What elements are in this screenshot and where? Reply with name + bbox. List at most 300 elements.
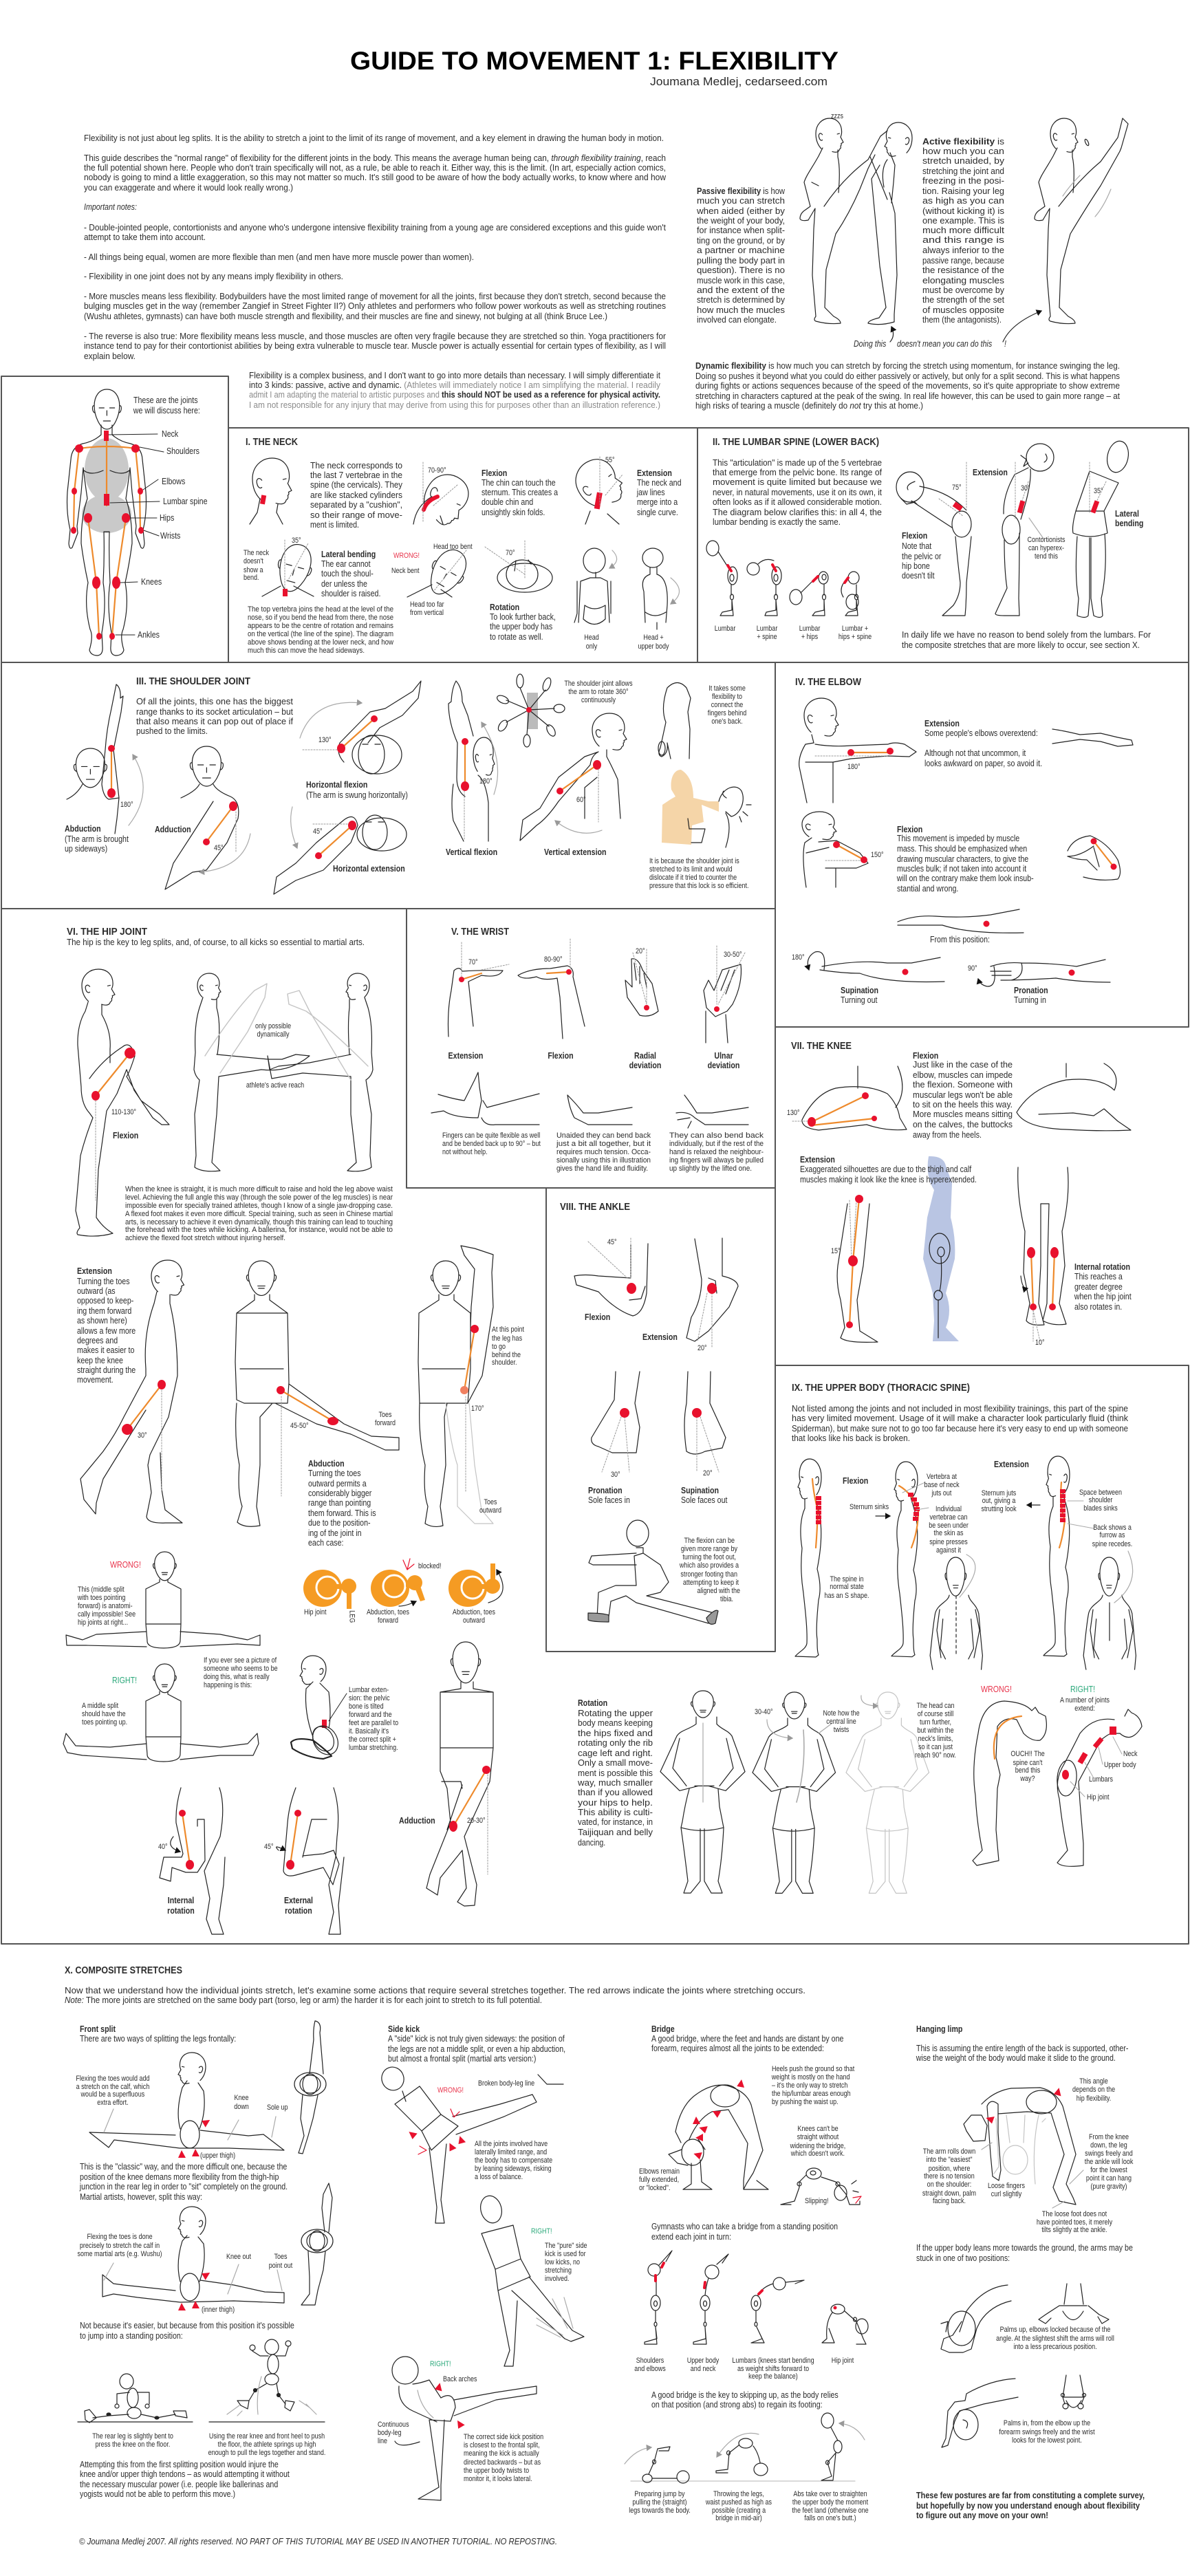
text: composite intro xyxy=(65,1985,805,2005)
figure: wrong neck bend: from vertical xyxy=(410,609,444,617)
text: active flexibility: one example. This is xyxy=(922,215,1004,226)
figure: wrong back bend: OUCH!! The xyxy=(1010,1750,1045,1758)
figure: vertical flexion: Vertical flexion xyxy=(446,847,497,857)
heading: X. COMPOSITE STRETCHES xyxy=(65,1965,182,1976)
heading: IX. THE UPPER BODY (THORACIC SPINE) xyxy=(792,1383,970,1394)
figure: fingers behind back: connect the xyxy=(711,701,744,709)
figure: fingers behind back: fingers behind xyxy=(708,709,746,717)
figure: hanging limp: straight down, palm xyxy=(922,2189,976,2198)
figure: wrong back bend: spine can't xyxy=(1013,1759,1043,1767)
figure: knee flexion xyxy=(787,1066,907,1130)
text: front split xyxy=(80,2024,236,2044)
figure: wrong side kick: All the joints involved have xyxy=(475,2140,548,2148)
figure: ankle supination: 20° xyxy=(703,1469,713,1478)
figure: pronation xyxy=(968,960,1110,1005)
heading: V. THE WRIST xyxy=(451,927,509,938)
figure: right middle split xyxy=(63,1664,259,1762)
figure: hand bent back together: requires much tension. Occa- xyxy=(556,1148,651,1156)
figure: hanging limp: the ankle will look xyxy=(1085,2158,1134,2166)
figure: active reach vs dynamic: only possible xyxy=(255,1022,291,1030)
diagram: orange hip joints: Abduction, toes xyxy=(453,1608,495,1616)
figure: hip abduction: Toes xyxy=(378,1411,392,1419)
figure: jump stick figures xyxy=(78,2339,325,2457)
figure: fingers bent back: and be bended back up to 90° – but xyxy=(442,1140,541,1148)
text: lumbar flexion xyxy=(902,530,941,581)
captions: Head + xyxy=(643,634,664,642)
text: neck extension: jaw lines xyxy=(636,487,665,497)
intro text block: attempt to take them into account. xyxy=(84,232,206,242)
figure: right back bend: Lumbars xyxy=(1089,1775,1113,1784)
text: elbow flexion: drawing muscular characters, to give the xyxy=(897,854,1029,864)
text: elbow extension xyxy=(924,718,1042,768)
figure: forearm neutral: From this position: xyxy=(930,934,990,944)
figure: wrong middle split: cally impossible! See xyxy=(78,1610,136,1619)
figure: skip-up sequence: the upper body the moment xyxy=(792,2498,868,2507)
figure: partner-assisted leg raise: zzzs xyxy=(831,112,843,120)
figure: right back bend: Upper body xyxy=(1104,1761,1136,1769)
panel: VIII. the ankle xyxy=(560,1202,740,1624)
text: neck flexion: The chin can touch the xyxy=(482,477,556,488)
diagram: 360 rotation star xyxy=(496,674,633,747)
text: dynamic flexibility xyxy=(695,360,1120,411)
figure: seated lumbar extension: forward and the xyxy=(349,1711,392,1719)
figure: horizontal extension xyxy=(274,807,407,894)
text: passive flexibility xyxy=(696,186,786,325)
figure: fingers behind back: flexibility to xyxy=(712,693,742,701)
text: knee flexion: away from the heels. xyxy=(913,1129,982,1140)
figure: forearm neutral xyxy=(898,909,1024,944)
text: rotation: ment is possible this xyxy=(578,1768,653,1778)
text: active flexibility: stretch unaided, by xyxy=(922,155,1005,166)
text: lumbar note: In daily life we have no reason to bend solely from the lumbars. For xyxy=(902,629,1151,640)
figure: correct side kick: monitor it, it looks lateral. xyxy=(464,2475,532,2483)
figure: abduction: up sideways) xyxy=(65,843,107,854)
figure: lunge: turning the foot out, xyxy=(682,1553,736,1561)
figure: lumbar extension: Contortionists xyxy=(1027,536,1065,544)
text: skipping up: A good bridge is the key to skipping up, as the body relies xyxy=(651,2390,839,2400)
figure: martial split xyxy=(77,2207,292,2314)
text: knee extension xyxy=(800,1154,977,1184)
figure: skip-up sequence: bridge in mid-air) xyxy=(715,2514,762,2522)
figure: rotation head turned, ghosted: of course still xyxy=(918,1710,953,1718)
panel borders xyxy=(1,376,1189,1944)
joint labels: Neck xyxy=(162,429,178,439)
figure: neck flexion xyxy=(413,462,477,530)
figure: ankle supination xyxy=(681,1372,728,1505)
text: neck rotation: To look further back, xyxy=(490,611,556,622)
text: lumbar intro: never, in natural movements, use it on its own, it xyxy=(713,487,882,497)
figure: seated lumbar extension: doing this, what is really xyxy=(204,1673,270,1681)
figure: seated lumbar extension: it. Basically it's xyxy=(349,1727,389,1735)
figure: hanging limp: into the "easiest" xyxy=(927,2156,973,2164)
figure: hanging limp: depends on the xyxy=(1072,2086,1115,2094)
figure: active reach vs dynamic: athlete's active reach xyxy=(246,1081,304,1090)
text: gymnasts xyxy=(651,2221,838,2242)
figure: hanging limp: The loose foot does not xyxy=(1042,2210,1107,2218)
text: rotation: your hips to help. xyxy=(578,1797,653,1808)
figure: spine flexion: be seen under xyxy=(929,1522,969,1530)
figure: correct side kick: body-leg xyxy=(378,2429,402,2437)
figure: rotation turned xyxy=(753,1692,860,1893)
text: composite intro: Now that we understand how the individual joints stretch, let's examine some actions that require several stretches together. The red arrows indicate the joints where stretching occurs. xyxy=(65,1985,805,1995)
heading: I. THE NECK xyxy=(246,437,298,448)
joint labels: Wrists xyxy=(160,530,180,541)
figure: neck side xyxy=(250,458,292,524)
text: passive flexibility: Passive flexibility is how xyxy=(697,186,786,196)
figure: spine extension: furrow as xyxy=(1099,1531,1125,1539)
figure: vertical flexion: 180° xyxy=(479,777,493,786)
text: hip extension: keep the knee xyxy=(77,1355,123,1365)
panel: X. composite stretches xyxy=(65,1965,1145,2546)
text: hip extension: allows a few more xyxy=(77,1325,136,1336)
figure: ulnar deviation: Ulnar xyxy=(714,1050,733,1061)
figure: shoulder lock: pressure that this lock is so efficient. xyxy=(649,882,749,890)
text: lumbar intro: often looks as if it allowed considerable motion. xyxy=(713,497,882,507)
figure: single finger bent back: individually, but if the rest of the xyxy=(669,1140,764,1148)
figure: martial split: (inner thigh) xyxy=(202,2306,235,2314)
figure: right middle split: should have the xyxy=(82,1710,126,1718)
figure: jump stick figures: the floor, the athlete springs up high xyxy=(218,2440,316,2449)
figure: ankle supination: Supination xyxy=(681,1485,719,1495)
text: passive flexibility: much you can stretch xyxy=(697,195,785,206)
figure: shoulder lock: dislocate if it tried to counter the xyxy=(649,874,737,882)
figure: ankle pronation xyxy=(588,1372,640,1505)
text: neck flexion: sternum. This creates a xyxy=(482,487,558,497)
figure: skip-up sequence: pulling the (straight) xyxy=(632,2498,687,2507)
figure: hip abduction toes outward: Toes xyxy=(484,1498,497,1506)
panel: VII. the knee xyxy=(787,1041,1132,1347)
figure: hip extension: 30° xyxy=(138,1431,147,1440)
text: active flexibility: how much you can xyxy=(922,146,1004,156)
text: hip abduction: Abduction xyxy=(308,1458,345,1469)
text: lumbar intro xyxy=(713,457,882,527)
joint labels: Shoulders xyxy=(166,446,199,456)
figure: right middle split: A middle split xyxy=(82,1702,118,1710)
text: straight knee note: impossible even for specially trained athletes, though I know of a single jaw-dropping case. xyxy=(125,1202,393,1210)
text: passive flexibility: the weight of your body, xyxy=(697,215,785,226)
text: rotation: the hips fixed and xyxy=(578,1728,653,1738)
figure: external rotation: External xyxy=(284,1895,313,1905)
figure: lunge: aligned with the xyxy=(697,1587,740,1595)
figure: lumbar flexion: 75° xyxy=(952,484,962,492)
text: neck extension xyxy=(636,468,682,517)
text: passive flexibility: how much the mucles xyxy=(697,305,785,315)
figure: hip abduction toes outward: the leg has xyxy=(492,1334,522,1343)
figure: correct side kick: line xyxy=(378,2437,387,2445)
text: hip abduction: them forward. This is xyxy=(308,1508,376,1518)
figure: abduction: (The arm is brought xyxy=(65,834,129,844)
text: rotation: way, much smaller xyxy=(577,1777,653,1788)
text: front split: There are two ways of splitting the legs frontally: xyxy=(80,2033,236,2044)
figure: lunge: The flexion can be xyxy=(684,1537,735,1545)
figure: spine normal xyxy=(795,1459,869,1657)
figure: lunge: stronger footing than xyxy=(680,1570,737,1579)
figure: hand bent back together: just a bit all together, but it xyxy=(556,1140,651,1148)
text: hip extension: Extension xyxy=(77,1266,112,1276)
figure: spine normal: The spine in xyxy=(830,1575,864,1583)
figure: wrong middle split: hip joints at right... xyxy=(78,1619,128,1627)
text: passive flexibility: when aided (either by xyxy=(696,206,786,216)
text: upper body intro: has very limited movement. Usage of it will make a character look particularly fluid (think xyxy=(792,1413,1128,1423)
figure: palms in positions: looks for the lowest point. xyxy=(1012,2436,1082,2445)
figure: wrong neck bend: Head too far xyxy=(410,600,444,609)
text: knee extension: Exaggerated silhouettes are due to the thigh and calf xyxy=(800,1164,972,1174)
figure: adduction xyxy=(155,746,250,889)
figure: single finger bent back: hand is relaxed the neighbour- xyxy=(669,1148,764,1156)
figure: ankle supination: Sole faces out xyxy=(681,1495,728,1505)
figure: palms in positions: Palms in, from the elbow up the xyxy=(1004,2419,1091,2427)
figure: right back bend: Hip joint xyxy=(1087,1793,1110,1801)
text: active flexibility: of muscles opposite xyxy=(922,305,1004,315)
figure: vertical extension: 60° xyxy=(576,796,586,804)
text: active flexibility: stretching the joint and xyxy=(922,166,1004,176)
text: gymnasts: extend each joint in turn: xyxy=(651,2231,731,2242)
intro text block xyxy=(84,133,667,361)
figure: spine extension: Sternum juts xyxy=(982,1489,1016,1497)
figure: knee internal rotation: greater degree xyxy=(1074,1281,1123,1292)
figure: bridge: widening the bridge, xyxy=(790,2142,845,2150)
figure: rotation neutral xyxy=(660,1691,745,1893)
figure: ankle extension: Extension xyxy=(642,1332,678,1342)
figure: fingers behind back: one's back. xyxy=(711,717,743,726)
text: attempting note xyxy=(80,2459,290,2499)
figure: knee internal rotation: Internal rotation xyxy=(1074,1262,1130,1272)
text: neck rotation: Rotation xyxy=(490,602,519,612)
figure: wrong neck bend: Head too bent xyxy=(433,543,473,551)
text: classic split description: position of the knee demans more flexibility from the thigh-hip xyxy=(80,2172,279,2182)
figure: rotation head turned, ghosted: so it can just xyxy=(918,1743,953,1751)
figure: ankle extension xyxy=(642,1238,738,1352)
panel: joints overview: we will discuss here: xyxy=(133,405,200,415)
footer copyright: © Joumana Medlej 2007. All rights reserved. NO PART OF THIS TUTORIAL MAY BE USED IN ANOTHER TUTORIAL. NO REPOSTING. xyxy=(79,2536,557,2546)
caption with arrows: Doing this xyxy=(854,338,886,349)
text: hip extension: Turning the toes xyxy=(77,1276,130,1286)
text: hip extension: straight during the xyxy=(77,1365,136,1375)
figure: martial split: Knee out xyxy=(226,2253,251,2261)
figure: hip adduction: Adduction xyxy=(399,1815,435,1826)
figure: knee extension xyxy=(831,1195,878,1342)
text: three kinds of flexibility: Flexibility is a complex business, and I don't want to go into more details than necessary. I will simply differentiate it xyxy=(249,370,660,380)
text: straight knee note: the forehead with the toes while kicking. A ballerina, for instance, would not be able to xyxy=(125,1226,393,1234)
captions: only xyxy=(586,642,597,651)
figure: elbow extension xyxy=(799,698,916,803)
text: elbow flexion: stantial and wrong. xyxy=(897,883,958,894)
text: side kick: but almost a frontal split (martial arts version:) xyxy=(388,2053,536,2064)
text: neck flexion xyxy=(482,468,558,517)
text: rotation xyxy=(577,1698,653,1848)
figure: ankle pronation: Sole faces in xyxy=(588,1495,630,1505)
figure: adduction: 45° xyxy=(214,844,224,852)
diagram: orange hip joints xyxy=(303,1559,503,1625)
figure: pure side kick: low kicks, no xyxy=(545,2258,580,2266)
figure: rotation head turned, ghosted: reach 90° now. xyxy=(915,1751,956,1760)
figure: hanging limp xyxy=(922,2077,1134,2234)
figure: correct side kick: Back arches xyxy=(443,2375,477,2383)
figure: bridge sequence: Upper body xyxy=(687,2357,719,2365)
figure: spine flexion: the skin as xyxy=(933,1529,964,1537)
text: neck note: much this can move the head sideways. xyxy=(248,647,365,655)
figure: wrong side kick: by leaning sideways, risking xyxy=(475,2165,552,2173)
closing note: These few postures are far from constituting a complete survey, xyxy=(916,2490,1145,2500)
figure: lunge: attempting to keep it xyxy=(683,1579,739,1587)
text: hip abduction: ing of the joint in xyxy=(308,1528,362,1538)
figure: hip extension xyxy=(80,1260,184,1523)
text: neck rotation: to rotate as well. xyxy=(490,631,543,642)
subtitle: Joumana Medlej, cedarseed.com xyxy=(650,75,827,88)
text: lateral bending: Lateral bending xyxy=(321,549,376,559)
text: bridge: forearm, requires almost all the joints to be extended: xyxy=(651,2043,824,2053)
figure: shoulder lock: It is because the shoulder joint is xyxy=(649,857,739,865)
text: knee flexion: Flexion xyxy=(913,1050,938,1061)
figure: seated lumbar extension: lumbar stretching. xyxy=(349,1744,398,1752)
figure: correct side kick: the upper body twists to xyxy=(464,2467,530,2475)
text: neck intro: are like stacked cylinders xyxy=(310,490,402,500)
closing note xyxy=(916,2490,1145,2520)
figure: lateral bending: show a xyxy=(244,566,263,574)
figure: classic split: down xyxy=(234,2103,249,2111)
figure: vertical flexion xyxy=(446,681,498,857)
text: lumbar flexion: doesn't tilt xyxy=(902,570,935,581)
figure: hanging limp: have pointed toes, it merely xyxy=(1037,2218,1112,2227)
figure: single finger bent back xyxy=(669,1095,764,1173)
text: attempting note: knee and/or upper thigh tendons – as would attempting it without xyxy=(80,2469,290,2479)
intro text block: instance tend to pay for their contortionist abilities by being extra vulnerable to muscle tear. Muscle power is actually essential for certain types of flexibility, as I will xyxy=(84,340,666,351)
figure: hanging limp: position, where xyxy=(929,2165,971,2173)
figure: lumbar lateral bending: bending xyxy=(1115,518,1143,528)
figure: knee extension: 15° xyxy=(831,1247,841,1255)
figure: bridge sequence: keep the balance) xyxy=(748,2372,798,2381)
figure: shoulder lock: stretched to its limit and would xyxy=(649,865,733,874)
caption with arrows: doesn't mean you can do this xyxy=(897,338,992,349)
figure: wrong neck bend xyxy=(391,543,474,617)
text: hip extension: makes it easier to xyxy=(77,1345,135,1355)
text: straight knee note: When the knee is straight, it is much more difficult to raise and hold the leg above waist xyxy=(125,1185,393,1193)
text: lumbar flexion: Note that xyxy=(902,541,932,551)
figure: pure side kick xyxy=(477,2194,587,2366)
figure: jump stick figures: enough to pull the legs together and stand. xyxy=(208,2449,325,2457)
figure: horizontal flexion xyxy=(300,681,421,800)
figure: hip abduction toes outward: shoulder. xyxy=(492,1359,517,1367)
figure: bridge: – it's the only way to stretch xyxy=(772,2081,847,2090)
text: jump note: Not because it's easier, but because from this position it's possible xyxy=(80,2320,294,2330)
figure: spine flexion: against it xyxy=(936,1546,961,1555)
text: neck intro: The neck corresponds to xyxy=(310,460,402,470)
figure: hand bent back together: sionally using this in illustration xyxy=(556,1156,651,1165)
figure: partner-assisted leg raise xyxy=(800,112,912,325)
joint labels: Lumbar spine xyxy=(163,496,208,506)
figure: spine extension: Space between xyxy=(1079,1489,1122,1497)
figure: skip-up sequence: the feet land (otherwise one xyxy=(792,2507,869,2515)
text: side kick: A "side" kick is not truly given sideways: the position of xyxy=(388,2033,565,2044)
figure: right middle split: RIGHT! xyxy=(112,1675,137,1685)
figure: bridge: Elbows remain xyxy=(639,2167,680,2176)
figure: elbow flexion xyxy=(802,812,884,887)
figure: horizontal flexion: 130° xyxy=(318,736,332,744)
figure: palms in positions: forearm swings freely and the wrist xyxy=(999,2428,1095,2436)
figure: knee internal rotation: also rotates in. xyxy=(1074,1301,1122,1312)
figure: right back bend: A number of joints xyxy=(1060,1696,1110,1704)
figure: ulnar deviation: 30-50° xyxy=(724,951,742,959)
figure: martial split: point out xyxy=(269,2262,292,2270)
figure: wrong side kick: Broken body-leg line xyxy=(478,2079,535,2088)
text: hip extension: movement. xyxy=(77,1374,113,1385)
figure: correct side kick: The correct side kick position xyxy=(464,2433,543,2441)
figure: supination: Supination xyxy=(841,985,878,995)
figure: spine flexion: vertebrae can xyxy=(929,1513,968,1522)
figure: neck rotation top view xyxy=(485,541,552,592)
figure: rotation turned: twists xyxy=(834,1726,849,1734)
figure: lumbar extension: tend this xyxy=(1035,552,1058,561)
figure: fingers bent back xyxy=(431,1072,541,1156)
figure: bridge sequence: and elbows xyxy=(634,2365,666,2373)
figure: vertical extension xyxy=(520,713,627,857)
figure: bridge: weight is mostly on the hand xyxy=(771,2073,850,2081)
figure: wrong side kick xyxy=(378,2064,563,2223)
text: skipping up: on that position (and strong abs) to regain its footing: xyxy=(651,2399,823,2410)
text: three kinds of flexibility: I am not responsible for any injury that may derive from using this for purposes other than an illustration reference.) xyxy=(249,400,660,410)
figure: lumbar extension xyxy=(973,444,1065,616)
figure: seated lumbar extension: the correct split + xyxy=(349,1735,396,1744)
figure: overextended arm xyxy=(1052,729,1133,746)
text: active flexibility: tion. Raising your leg xyxy=(922,186,1004,196)
figure: horizontal flexion: Horizontal flexion xyxy=(306,779,367,790)
figure: spine extension: strutting look xyxy=(982,1505,1017,1513)
text: lumbar note: the composite stretches that are more likely to occur, see section X. xyxy=(902,640,1140,650)
intro text block: - Flexibility in one joint does not by any means imply flexibility in others. xyxy=(84,271,343,281)
text: neck intro xyxy=(310,460,402,530)
text: hanging limp: This is assuming the entire length of the back is supported, other- xyxy=(916,2043,1128,2053)
captions: hips + spine xyxy=(839,633,872,641)
figure: lateral bending: The neck xyxy=(244,549,270,557)
text: hip abduction: due to the position- xyxy=(308,1517,371,1528)
panel: IX. the upper body xyxy=(577,1383,1142,1893)
figure: fingers behind back: It takes some xyxy=(708,684,746,693)
text: shoulder intro xyxy=(136,696,293,736)
text: neck note: appears to be the centre of rotation and remains xyxy=(248,622,393,630)
figure: hand bent back together: Unaided they can bend back xyxy=(556,1132,651,1140)
figure: bridge: Knees can't be xyxy=(797,2125,839,2133)
figure: wrong back bend: way? xyxy=(1020,1775,1035,1783)
text: upper body intro: that looks like his back is broken. xyxy=(792,1433,910,1443)
text: three kinds of flexibility: into 3 kinds: passive, active and dynamic. (Athletes will immediately notice I am simplifying the material. I readily xyxy=(249,380,660,390)
text: upper body intro xyxy=(792,1403,1128,1443)
text: hanging limp: Hanging limp xyxy=(916,2024,962,2034)
figure: jump stick figures: Using the rear knee and front heel to push xyxy=(209,2432,325,2440)
text: neck intro: spine (the cervicals). They xyxy=(310,479,402,490)
figure: lateral bending: bend. xyxy=(244,574,259,582)
figure: rotation head turned, ghosted: but within the xyxy=(917,1727,954,1735)
figure: ankle pronation: 30° xyxy=(611,1471,620,1479)
text: rotation: dancing. xyxy=(578,1837,605,1848)
text: upper body intro: Spiderman), but make sure not to go too far because here it's very easy to end up with someone xyxy=(792,1423,1128,1433)
figure: supination xyxy=(792,952,944,1005)
figure: supination: Turning out xyxy=(841,995,878,1005)
panel: joints overview: These are the joints xyxy=(133,395,198,405)
text: classic split description: This is the "classic" way, and the more difficult one, because the xyxy=(80,2161,288,2172)
figure: classic split: a stretch on the calf, which xyxy=(76,2083,149,2091)
text: neck note: The top vertebra joins the head at the level of the xyxy=(248,605,393,614)
text: attempting note: Attempting this from the first splitting position would injure the xyxy=(80,2459,279,2469)
figure: ankle pronation: Pronation xyxy=(588,1485,623,1495)
text: active flexibility: (without kicking it) is xyxy=(922,206,1005,216)
figure: palms up positions: Palms up, elbows locked because of the xyxy=(1000,2326,1111,2334)
figure: wrist flexion: 80-90° xyxy=(544,955,563,964)
text: rotation: body means keeping xyxy=(578,1718,653,1728)
figure: internal rotation: 40° xyxy=(158,1843,168,1851)
figure: skip-up sequence: waist pushed as high as xyxy=(705,2498,772,2507)
figure: correct side kick: meaning the kick is actually xyxy=(464,2449,539,2458)
text: active flexibility: as high as you can xyxy=(922,195,1004,206)
